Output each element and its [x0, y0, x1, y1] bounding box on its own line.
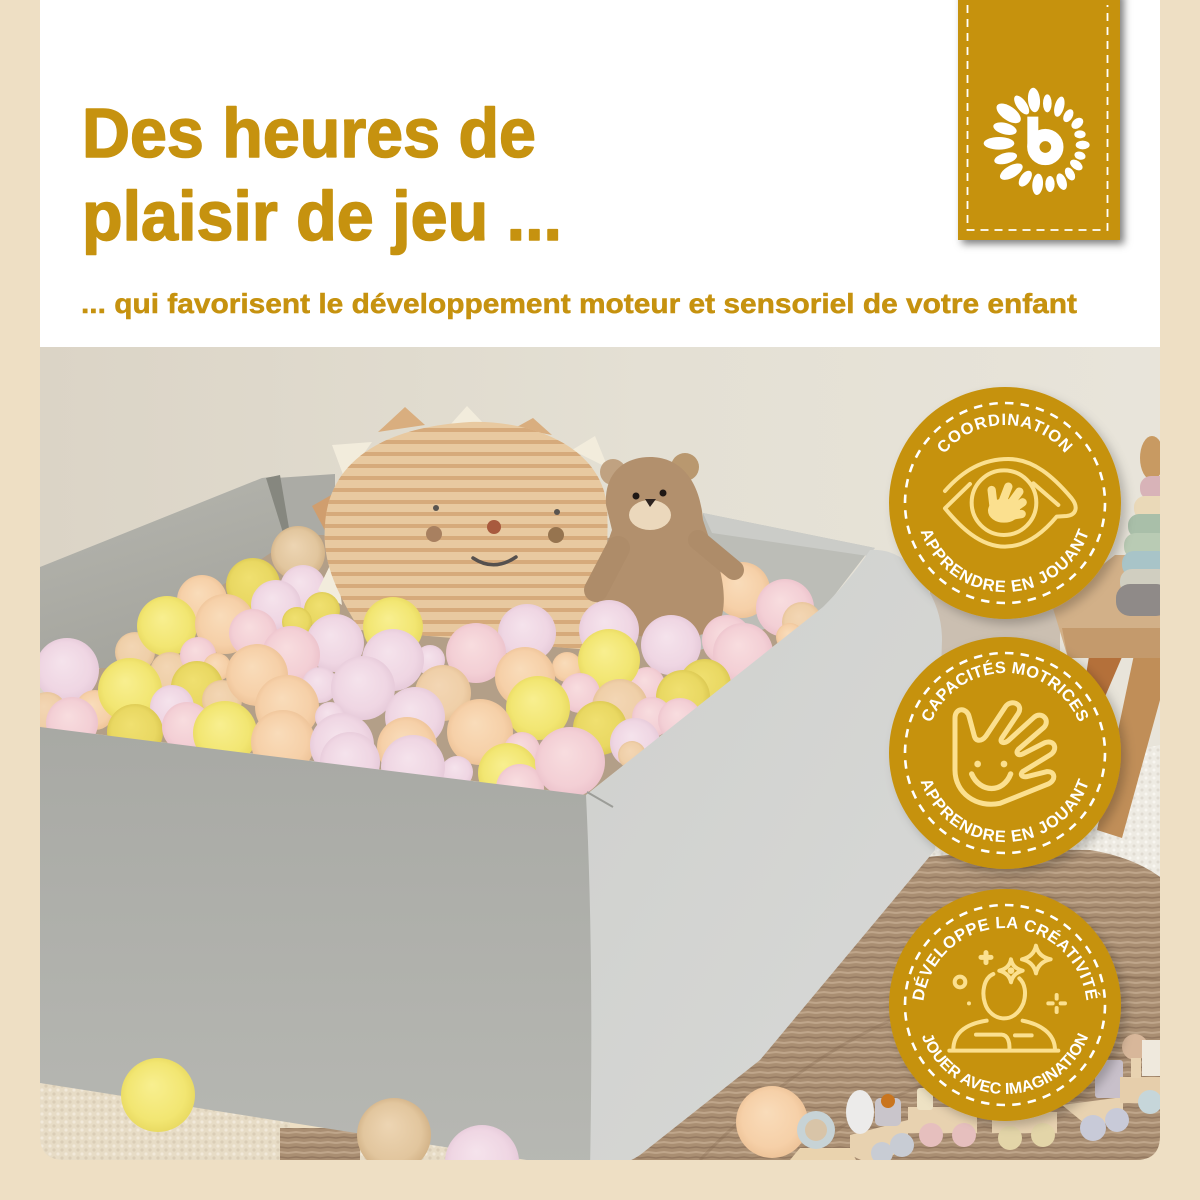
white floor mat	[930, 746, 1160, 877]
bear muzzle	[629, 500, 671, 530]
subtitle: ... qui favorisent le développement moteur et sensoriel de votre enfant	[81, 288, 1077, 319]
white header panel	[40, 0, 1160, 347]
photo: ball pit scene	[27, 347, 1170, 1199]
badge caption: JOUER AVEC IMAGINATION	[922, 1032, 1088, 1094]
loose ball: tan	[357, 1098, 431, 1160]
dashed stitch ring	[905, 653, 1105, 853]
badge heading: COORDINATION	[938, 414, 1073, 453]
stool	[1052, 555, 1160, 838]
bear body	[597, 457, 724, 638]
badge caption: APPRENDRE EN JOUANT	[920, 528, 1088, 592]
loose ball: yellow	[121, 1058, 195, 1132]
badge disc	[889, 637, 1121, 869]
badge heading: CAPACITÉS MOTRICES	[922, 660, 1088, 722]
badge: creativity	[889, 889, 1130, 1130]
stacking toy	[1116, 436, 1160, 616]
plush dinosaur pillow	[312, 406, 608, 650]
pit front wall	[40, 727, 591, 1170]
wooden toy trains	[790, 1034, 1165, 1165]
bear arms	[596, 548, 618, 590]
icon: eye with hand	[945, 459, 1076, 547]
jute rug	[632, 850, 1160, 1160]
back-left wall of pit	[40, 476, 290, 668]
badge heading: DÉVELOPPE LA CRÉATIVITÉ	[912, 916, 1101, 1000]
plush teddy bear	[596, 453, 734, 638]
badge disc	[889, 387, 1121, 619]
badge: motor skills	[889, 637, 1130, 878]
dashed stitch ring	[905, 905, 1105, 1105]
back-right wall of pit	[700, 513, 875, 650]
icon: meditating figure with stars	[949, 946, 1065, 1051]
icon: smiling hand	[955, 703, 1055, 804]
tag ribbon	[958, 0, 1120, 240]
badge disc	[889, 889, 1121, 1121]
stool top	[1052, 555, 1160, 658]
pit right side wall	[586, 550, 942, 1170]
woven floor mat	[40, 1083, 290, 1160]
tag stitching	[968, 5, 1108, 230]
brand tag with logo	[958, 0, 1120, 240]
pillow body	[325, 422, 608, 650]
balls behind plush toys	[226, 526, 822, 651]
title: Des heures de	[82, 94, 536, 172]
loose ball: pink	[445, 1125, 519, 1160]
wall shadow near the pit	[930, 592, 1060, 656]
title	[82, 94, 562, 255]
dashed stitch ring	[905, 403, 1105, 603]
title: plaisir de jeu ...	[82, 177, 562, 255]
pit interior	[92, 535, 778, 795]
wall	[40, 347, 1160, 767]
balls in the pit	[27, 575, 773, 812]
pillow spikes	[378, 407, 425, 432]
logo: flower b	[984, 87, 1090, 195]
loose ball: peach	[736, 1086, 808, 1158]
badge caption: APPRENDRE EN JOUANT	[920, 778, 1088, 842]
bear ears	[600, 459, 624, 484]
stool legs	[1086, 658, 1122, 696]
badge: coordination	[889, 387, 1130, 628]
pit corner seam	[587, 792, 613, 807]
pillow face	[426, 526, 442, 542]
